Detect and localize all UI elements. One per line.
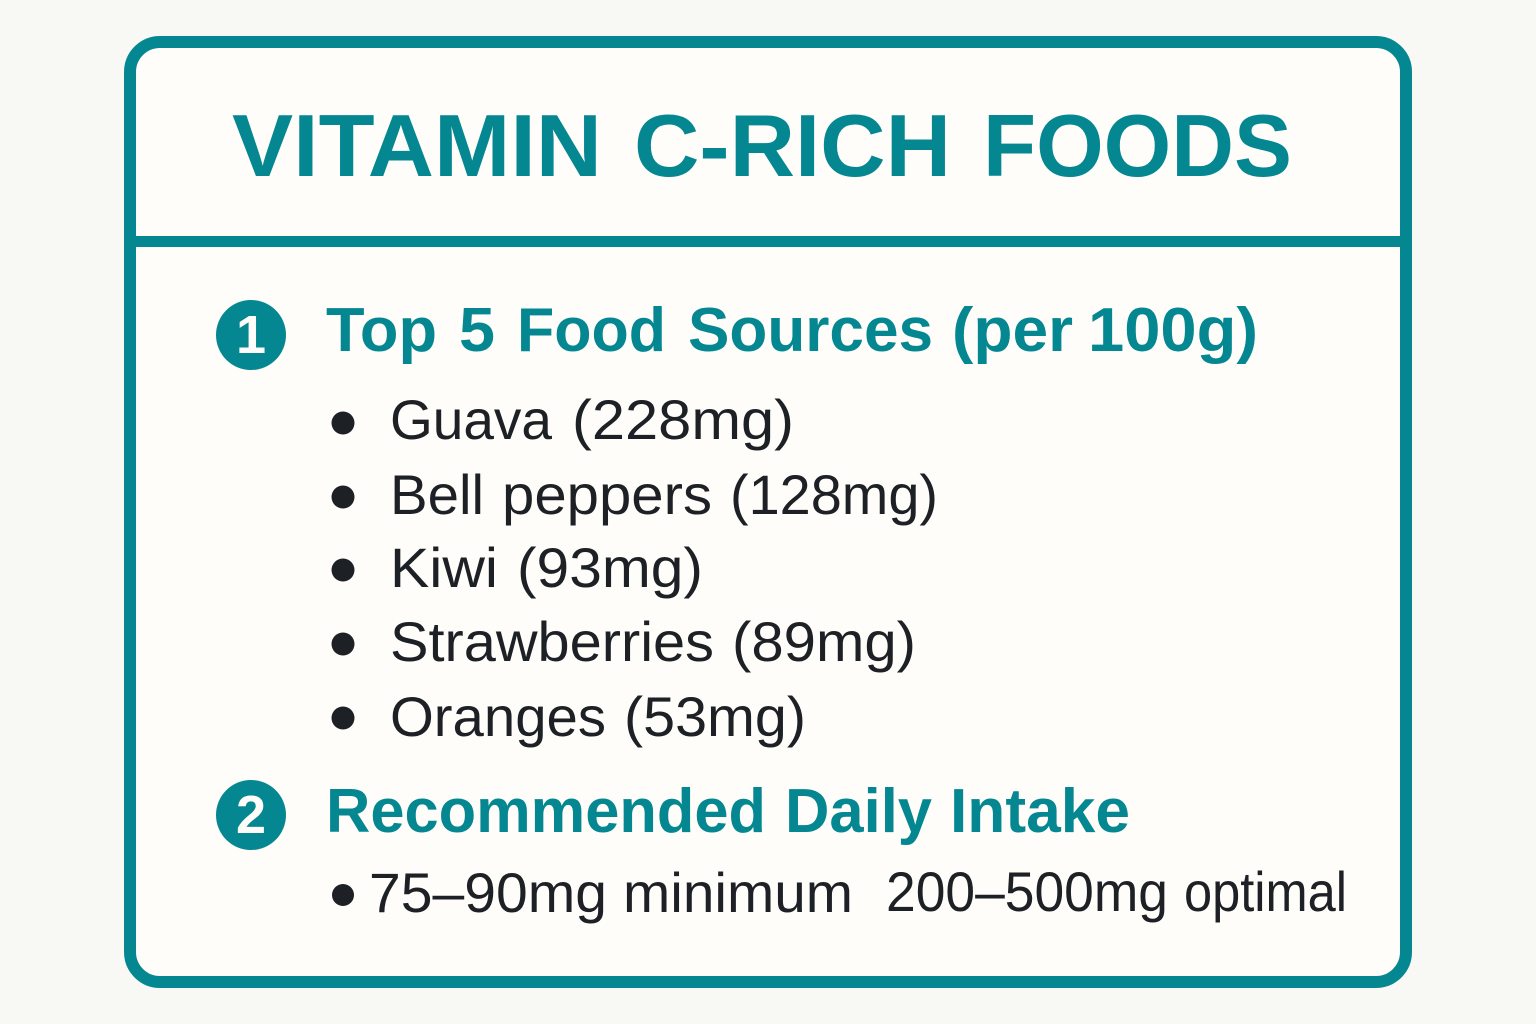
food source list: (53mg) xyxy=(624,685,806,748)
section 1 heading: Sources xyxy=(688,296,933,365)
food source list: (128mg) xyxy=(730,463,938,526)
food source list: (228mg) xyxy=(572,388,794,451)
section 1 heading: Top xyxy=(326,296,437,365)
title: FOODS xyxy=(983,96,1292,195)
daily intake line: 75–90mg xyxy=(369,861,607,924)
food source list: Guava xyxy=(390,388,553,451)
section 1 heading: (per xyxy=(952,296,1073,365)
food source list: Kiwi xyxy=(390,536,498,599)
section 2 heading: Intake xyxy=(950,777,1130,846)
section 1 heading: Food xyxy=(517,296,666,365)
title: VITAMIN xyxy=(232,96,602,195)
daily intake line xyxy=(332,860,1347,924)
food source list: Oranges xyxy=(390,685,606,748)
title: C-RICH xyxy=(634,96,951,195)
food source list: peppers xyxy=(502,463,712,526)
section 2 heading: Daily xyxy=(785,777,932,846)
section 2 badge xyxy=(216,780,286,850)
section 1 badge xyxy=(216,300,286,370)
section 2 badge: 2 xyxy=(236,785,266,845)
food source list: (89mg) xyxy=(732,610,916,673)
section 1 heading: 5 xyxy=(459,296,495,365)
daily intake line: minimum xyxy=(623,861,853,924)
section 1 badge: 1 xyxy=(236,305,266,365)
food source list: (93mg) xyxy=(517,536,703,599)
title xyxy=(232,96,1292,195)
daily intake line: optimal xyxy=(1184,860,1347,923)
section 2 heading: Recommended xyxy=(326,777,766,846)
section 1 heading: 100g) xyxy=(1088,296,1258,365)
food source list xyxy=(332,388,938,748)
section 2 heading xyxy=(326,777,1130,846)
daily intake line: 200–500mg xyxy=(886,860,1168,923)
food source list: Bell xyxy=(390,463,484,526)
card panel xyxy=(130,42,1406,982)
food source list: Strawberries xyxy=(390,610,714,673)
section 1 heading xyxy=(326,296,1258,365)
